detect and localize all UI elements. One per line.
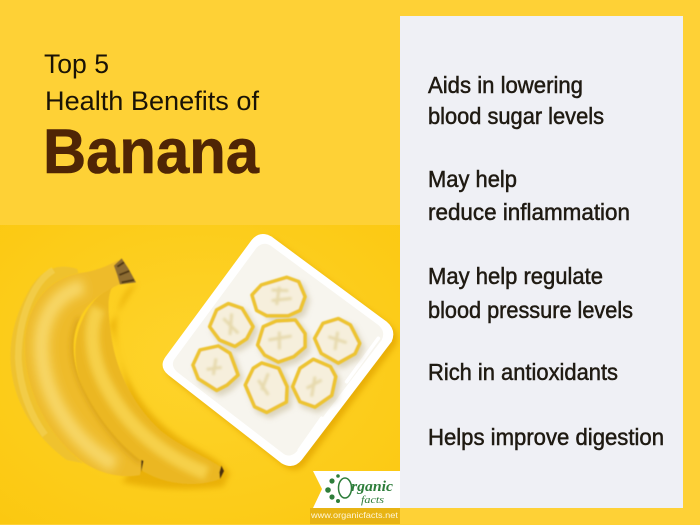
banana: back left <box>10 267 83 463</box>
banana tip <box>219 466 224 479</box>
logo ribbon <box>313 471 400 508</box>
panel: benefits <box>400 16 683 508</box>
icon: leaf swirl <box>325 474 352 503</box>
benefit 2: reduce inflammation <box>428 199 630 225</box>
banana: right <box>75 288 224 484</box>
benefit 2: May help <box>428 166 517 192</box>
banana slice 2 <box>210 304 253 346</box>
title word: Banana: Banana <box>43 117 260 187</box>
benefit 3 <box>428 263 633 323</box>
title line: Health Benefits of: Health Benefits of <box>45 86 259 116</box>
banana slice 6 <box>245 363 287 412</box>
title line: Top 5: Top 5 <box>44 49 109 79</box>
title block <box>43 49 260 187</box>
logo subtext: facts <box>361 494 384 506</box>
logo wordmark: rganic <box>351 479 393 495</box>
logo: Organic Facts <box>310 471 400 520</box>
benefit 3: May help regulate <box>428 263 603 289</box>
benefit 1: blood sugar levels <box>428 103 604 129</box>
plate <box>163 234 397 470</box>
banana shadow <box>110 283 230 489</box>
banana stem <box>114 258 136 284</box>
benefit 4: Rich in antioxidants <box>428 359 618 385</box>
url strip <box>310 508 400 524</box>
benefit 5: Helps improve digestion <box>428 424 664 450</box>
slices shadow <box>194 280 365 418</box>
benefit 3: blood pressure levels <box>428 297 633 323</box>
website url: www.organicfacts.net <box>310 510 399 520</box>
benefit 1 <box>428 72 604 129</box>
photo: bananas and plate <box>0 225 400 524</box>
banana slice 1 <box>252 277 305 316</box>
banana slice 3 <box>258 320 305 362</box>
banana slice 7 <box>293 359 336 407</box>
benefit 1: Aids in lowering <box>428 72 583 98</box>
benefit 2 <box>428 166 630 225</box>
banana slice 5 <box>193 346 238 390</box>
banana slice 4 <box>315 319 360 363</box>
banana: front <box>25 260 144 476</box>
